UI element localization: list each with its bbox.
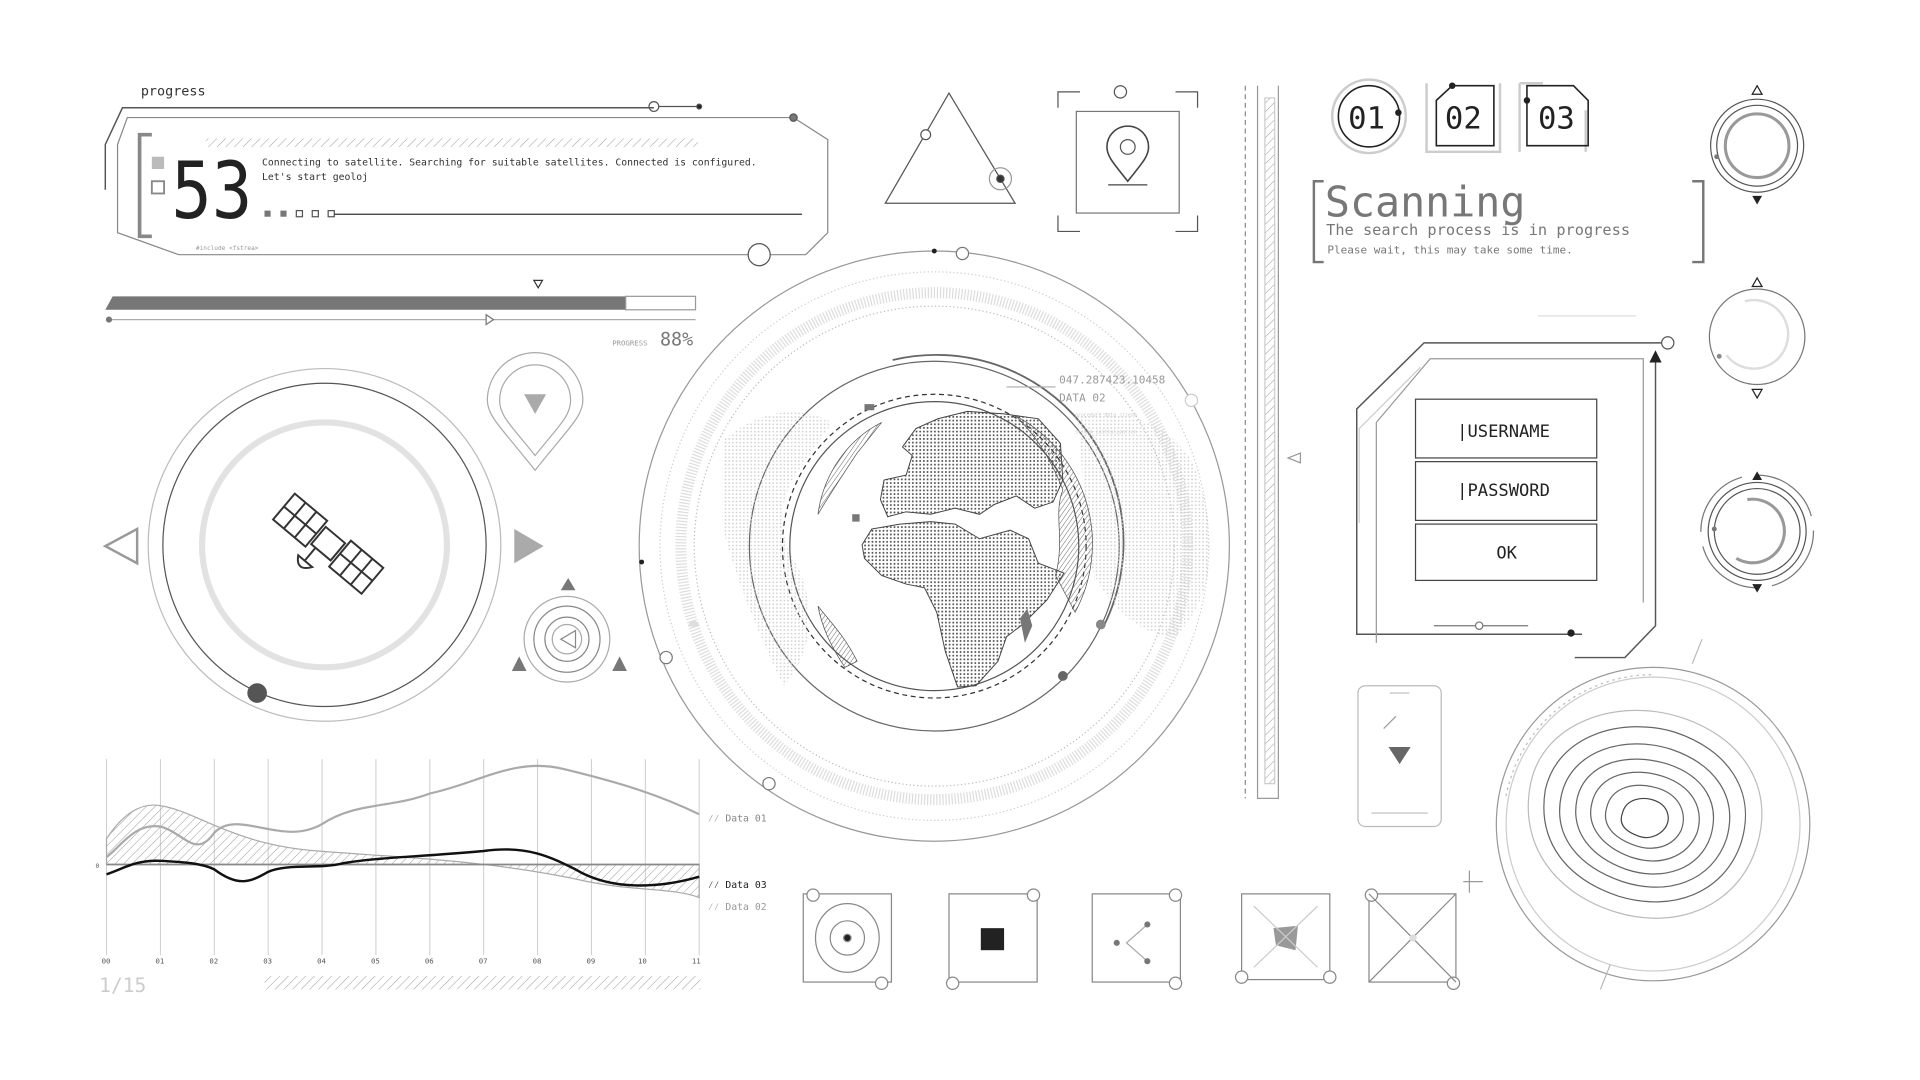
map: africa (862, 522, 1064, 687)
chart: line chart: 01 (156, 957, 164, 966)
step badges (1332, 80, 1588, 153)
login panel: |USERNAME (1457, 422, 1550, 442)
chart: line chart: 11 (692, 957, 701, 966)
scanning text block: Scanning (1325, 178, 1525, 227)
login panel: OK (1496, 543, 1518, 563)
icon: triangle dial (512, 578, 627, 682)
icon: target box (803, 889, 891, 989)
knobs right (1701, 86, 1813, 593)
icon: map pin box (1058, 86, 1198, 231)
chart: line chart: 1/15 (99, 974, 146, 997)
progress bar: PROGRESS (612, 338, 648, 347)
chart: line chart: 05 (371, 957, 380, 966)
bottom icon row (803, 889, 1460, 989)
panel: progress console (105, 85, 828, 266)
map: hatched globe edges (1016, 416, 1092, 612)
globe data text: 047.287423.10458 (1059, 373, 1165, 386)
scanning text block (1314, 178, 1703, 262)
chart: line chart: 10 (638, 957, 647, 966)
step badges: 03 (1538, 102, 1575, 137)
chart: line chart: 07 (479, 957, 488, 966)
chart: line chart: 04 (317, 957, 327, 966)
globe data text (1007, 373, 1165, 435)
globe data text: procedure data stream (1075, 412, 1137, 418)
icon: square box (947, 889, 1040, 989)
chart: line chart: 06 (425, 957, 434, 966)
chart: line chart: 08 (533, 957, 541, 966)
globe data text: stream initialization (1075, 429, 1137, 435)
icon: x box (1365, 889, 1460, 989)
globe data text: DATA 02 (1059, 392, 1106, 405)
panel: satellite dial (105, 369, 544, 721)
panel: progress console: Let's start geoloj (262, 172, 368, 183)
chart: line chart: 00 (102, 957, 110, 966)
step badges: 02 (1445, 102, 1482, 137)
panel: progress console: #include <fstrea> (196, 245, 259, 252)
chart: line chart (96, 759, 767, 997)
heading: progress: progress (141, 85, 206, 100)
legend (708, 814, 767, 913)
progress bar: 88% (660, 329, 693, 350)
map: faint world (722, 412, 833, 686)
progress bar (105, 280, 696, 350)
login panel (1357, 316, 1674, 658)
map: europe (880, 411, 1063, 517)
login panel: |PASSWORD (1457, 481, 1550, 501)
chart: line chart: 02 (209, 957, 218, 966)
icon: triangle (885, 93, 1015, 203)
legend: ⁄⁄ Data 02 (708, 902, 767, 913)
legend: ⁄⁄ Data 03 (708, 880, 767, 891)
icon: location pin (487, 353, 583, 470)
globe (639, 247, 1229, 841)
big number: 53 (171, 146, 252, 237)
topographic radar (1463, 639, 1810, 989)
icon: phone (1358, 686, 1441, 827)
icon: triangle dots box (1092, 889, 1182, 989)
step badges: 01 (1348, 102, 1385, 137)
panel: progress console: Connecting to satellite. Searching for suitable satellites. Connected is configured. (262, 157, 757, 168)
icon: satellite (261, 494, 383, 608)
chart: line chart: 03 (263, 957, 272, 966)
icon: diamond box (1236, 894, 1336, 983)
scanning text block: The search process is in progress (1326, 221, 1630, 239)
chart: line chart: 09 (587, 957, 595, 966)
vertical divider bars (1245, 86, 1300, 798)
chart: line chart: 0 (96, 863, 100, 870)
legend: ⁄⁄ Data 01 (708, 814, 767, 825)
scanning text block: Please wait, this may take some time. (1327, 243, 1573, 256)
